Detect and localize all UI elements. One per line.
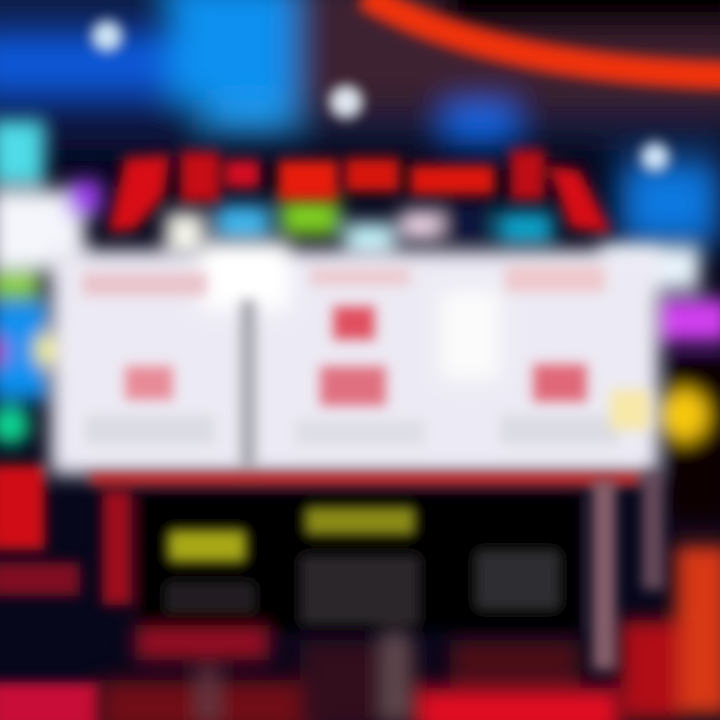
colourful strip under title — [165, 198, 553, 257]
label: left screen highlight — [165, 530, 255, 614]
panel: three white cards — [50, 240, 660, 475]
floor — [100, 625, 620, 720]
label: right screen text — [475, 550, 560, 610]
right side lights — [600, 245, 720, 720]
panel: middle card — [240, 268, 425, 470]
panel: right card — [500, 266, 650, 445]
background: ceiling lights — [0, 0, 720, 245]
label: middle screen highlight — [300, 507, 420, 625]
title — [108, 150, 612, 234]
left side lights — [0, 120, 102, 720]
red ledge under cards — [90, 472, 640, 486]
neon arc — [365, 0, 720, 76]
panel: slot machine screens — [102, 470, 664, 670]
panel: left card — [82, 272, 215, 445]
